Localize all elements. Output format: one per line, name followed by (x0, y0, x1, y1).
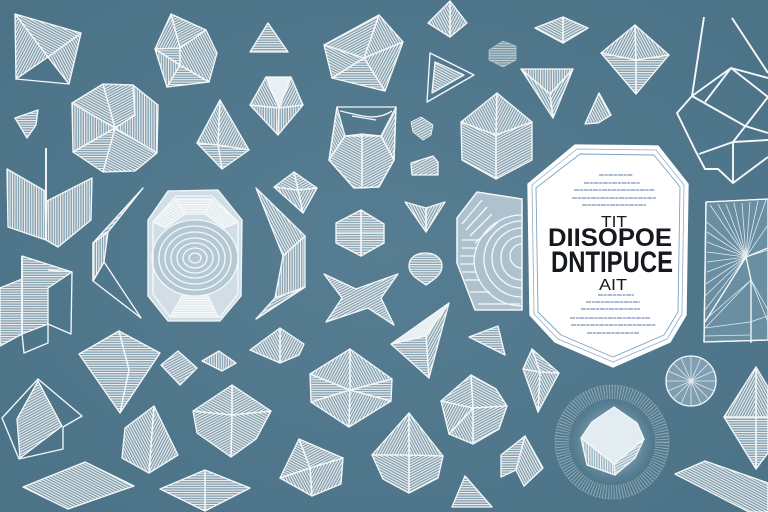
gem: droplet (409, 253, 442, 285)
heading (548, 214, 673, 294)
card: octagonal label (528, 145, 688, 367)
gem: triangular prism (391, 303, 449, 378)
gem: small diamond mid (274, 172, 317, 213)
shape: open book lower (0, 256, 72, 353)
gem: hexagon (336, 210, 384, 256)
gem: small shard (585, 93, 611, 124)
gem: right spike (256, 188, 305, 319)
gem: tall kite (197, 100, 249, 169)
small footer lines (570, 295, 656, 333)
gem: flat hexagon (250, 328, 304, 363)
gem: small faded hexagon (489, 41, 516, 67)
gem: four-point star (324, 274, 398, 325)
heading: AIT (599, 277, 627, 294)
gem: small top triangle (250, 23, 288, 52)
gem: upright kite lower right (523, 349, 559, 412)
shape: wireframe top-right (677, 17, 768, 183)
gem: small top kite (428, 1, 467, 37)
gem: upper polygon (324, 15, 403, 91)
gem: low polygon (280, 439, 343, 496)
gem: flat rhombus right (160, 470, 250, 511)
gem: detailed centre polygon (329, 107, 396, 188)
gem: faceted polygon (155, 14, 217, 87)
central gem (581, 407, 644, 464)
gem: bottom triangle (452, 476, 492, 507)
small header lines (572, 175, 656, 205)
gem: roof polygon (461, 93, 532, 179)
gem: small top-right diamond (535, 17, 588, 43)
gem: small trapezoid (411, 156, 438, 175)
gem: triangle (427, 53, 474, 102)
gem: left spike (93, 188, 143, 318)
gem: pyramid (122, 406, 178, 473)
heading: DIISOPOE (548, 224, 672, 252)
gem: small arrowhead (15, 110, 38, 138)
gem: small hexagon (411, 117, 433, 140)
gem: down triangle (405, 202, 445, 232)
gem: central large octagon (148, 190, 242, 321)
gem: round polygon (441, 375, 507, 444)
gem: wide hexagon (193, 385, 271, 457)
gem: wide large hexagon (310, 349, 392, 427)
heading: DNTIPUCE (551, 246, 673, 279)
shape: open book upper (7, 148, 92, 247)
heading: TIT (601, 214, 627, 231)
gem: octagon (72, 84, 158, 172)
gem: top-left kite (15, 14, 81, 84)
gem: halo with faceted gem (555, 385, 669, 499)
gem: small lens diamond (202, 351, 236, 371)
gem: diamond near halo (501, 436, 543, 486)
soft glow (566, 396, 658, 488)
gem: ray panel far right (704, 199, 768, 343)
gem: wire pyramid (2, 379, 82, 459)
gem: flat rhombus left (23, 462, 134, 509)
gem: lower pentagon (372, 413, 443, 493)
gem: radial disc (666, 356, 716, 406)
card border lines (532, 149, 684, 362)
gem: concentric panel next to card (457, 192, 522, 310)
gem: small right triangle (469, 326, 505, 355)
gem: lower kite (79, 331, 160, 413)
gem: bottom right slab (675, 461, 768, 512)
gem: right edge kite (724, 367, 768, 469)
gem: small diamond (161, 351, 197, 385)
gem: pentagon (250, 77, 303, 135)
card background (528, 145, 688, 367)
gem: rounded kite (601, 25, 669, 94)
radiating halo (562, 392, 662, 492)
gem: funnel triangle (521, 69, 573, 118)
